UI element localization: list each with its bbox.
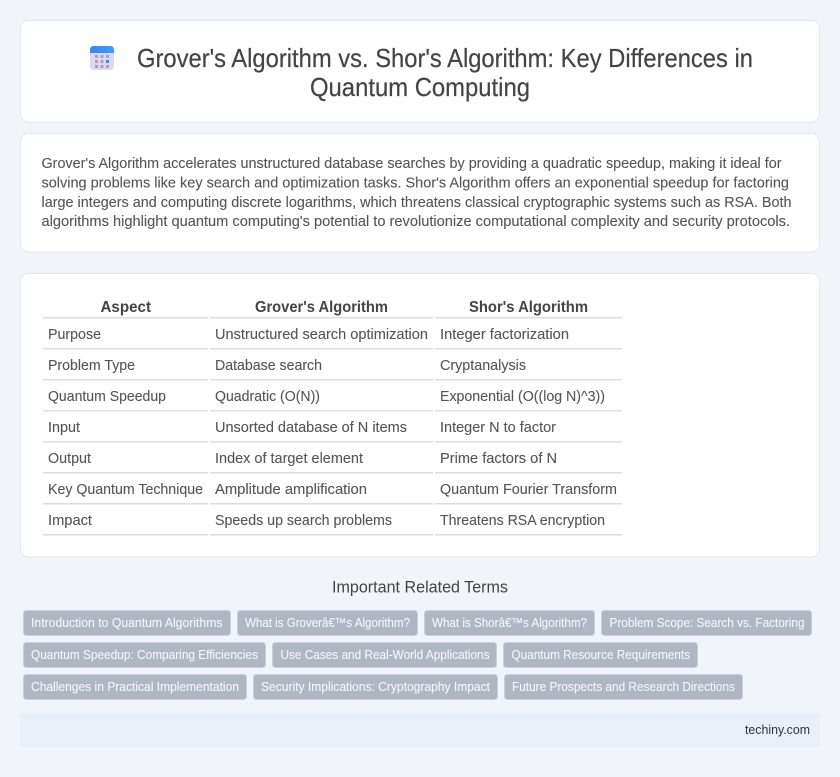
summary text: Grover's Algorithm accelerates unstructured database searches by providing a quadratic speedup, making it ideal for — [42, 155, 782, 172]
row: key quantum technique: Key Quantum Technique — [48, 481, 203, 498]
table header row: Aspect — [100, 299, 152, 316]
summary text — [42, 155, 792, 230]
row: quantum speedup: Quadratic (O(N)) — [215, 388, 320, 405]
footer: techiny.com — [745, 722, 810, 737]
row: purpose: Unstructured search optimization — [215, 326, 428, 343]
row: output: Prime factors of N — [440, 450, 557, 467]
row: purpose: Purpose — [48, 326, 101, 343]
row: key quantum technique — [48, 481, 617, 498]
tag — [24, 610, 230, 636]
row: output: Output — [48, 450, 92, 467]
panel: header — [20, 20, 820, 122]
row: output: Index of target element — [215, 450, 364, 467]
row: impact: Speeds up search problems — [215, 512, 392, 529]
row: quantum speedup: Exponential (O((log N)^3)) — [440, 388, 605, 405]
row: input: Unsorted database of N items — [215, 419, 407, 436]
row: input — [48, 419, 556, 436]
row: impact — [48, 512, 605, 529]
row: problem type: Database search — [215, 357, 322, 374]
row: key quantum technique: Quantum Fourier Transform — [440, 481, 617, 498]
tag — [24, 674, 246, 700]
row: key quantum technique: Amplitude amplification — [215, 481, 367, 498]
tag: Use Cases and Real-World Applications — [280, 648, 490, 662]
title: Quantum Computing — [310, 72, 530, 102]
tag — [504, 674, 742, 700]
tag — [504, 642, 698, 668]
tag: Future Prospects and Research Directions — [512, 680, 735, 694]
tag: Challenges in Practical Implementation — [31, 680, 239, 694]
row: problem type: Cryptanalysis — [440, 357, 526, 374]
panel: comparison table — [20, 274, 820, 557]
panel: summary — [20, 134, 820, 252]
icon: calendar grid — [90, 46, 114, 70]
row: impact: Threatens RSA encryption — [440, 512, 605, 529]
table header row — [100, 299, 588, 316]
tag: Quantum Speedup: Comparing Efficiencies — [31, 648, 258, 662]
tag — [238, 610, 418, 636]
row: purpose: Integer factorization — [440, 326, 569, 343]
footer — [20, 713, 820, 747]
tag — [602, 610, 812, 636]
row: problem type — [48, 357, 526, 374]
tag: What is Groverâ€™s Algorithm? — [245, 616, 410, 630]
tag — [424, 610, 594, 636]
related terms heading: Important Related Terms — [332, 578, 508, 596]
tag — [24, 642, 266, 668]
panel: related term tags — [24, 610, 812, 700]
title: Grover's Algorithm vs. Shor's Algorithm: Key Differences in — [137, 43, 753, 73]
row: input: Integer N to factor — [440, 419, 556, 436]
row: quantum speedup: Quantum Speedup — [48, 388, 166, 405]
row: output — [48, 450, 557, 467]
tag: Introduction to Quantum Algorithms — [31, 616, 222, 630]
title — [137, 43, 753, 102]
tag: Security Implications: Cryptography Impact — [261, 680, 490, 694]
summary text: algorithms highlight quantum computing's potential to revolutionize computational complexity and security protocols. — [42, 213, 790, 230]
row: problem type: Problem Type — [48, 357, 135, 374]
table header row: Shor's Algorithm — [469, 299, 588, 316]
row: input: Input — [48, 419, 81, 436]
row: quantum speedup — [48, 388, 605, 405]
summary text: large integers and computing discrete logarithms, which threatens classical cryptographic systems such as RSA. Both — [42, 194, 792, 211]
tag: Problem Scope: Search vs. Factoring — [610, 616, 804, 630]
row: purpose — [48, 326, 569, 343]
tag — [272, 642, 496, 668]
table header row: Grover's Algorithm — [255, 299, 388, 316]
summary text: solving problems like key search and optimization tasks. Shor's Algorithm offers an exponential speedup for factoring — [42, 174, 789, 192]
row: impact: Impact — [48, 512, 93, 529]
tag: What is Shorâ€™s Algorithm? — [432, 616, 587, 630]
tag: Quantum Resource Requirements — [512, 648, 690, 662]
tag — [254, 674, 498, 700]
table rules — [43, 317, 622, 536]
